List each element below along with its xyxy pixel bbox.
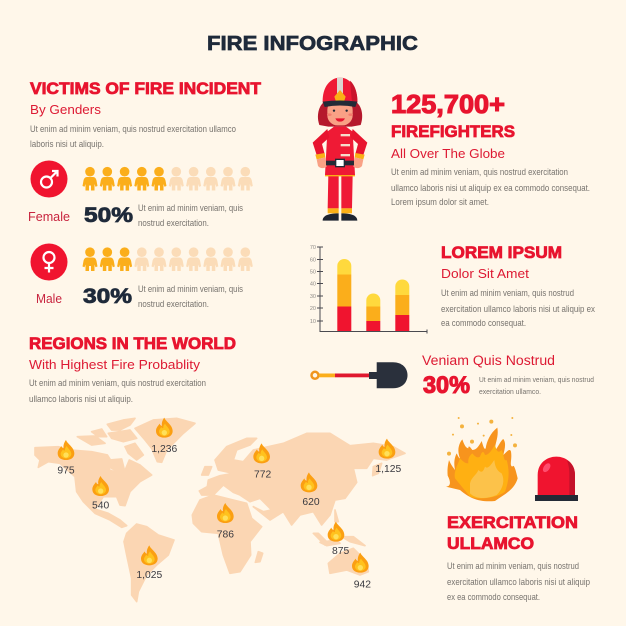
text block: lorem ipsum: Ut enim ad minim veniam, quis nostrud	[441, 288, 574, 299]
text block: regions: Ut enim ad minim veniam, quis nostrud exercitation	[29, 378, 206, 389]
pictogram: 30 percent row	[82, 247, 253, 271]
label: male: Male	[36, 292, 62, 306]
text block: regions: ullamco laboris nisi ut aliquip.	[29, 394, 133, 405]
text block: victims intro: laboris nisi ut aliquip.	[30, 139, 104, 150]
panel: exercitation ullamco	[447, 513, 590, 603]
heading: lorem ipsum: LOREM IPSUM	[441, 243, 562, 262]
text block: male note	[138, 284, 243, 310]
stat: 30 percent red: 30%	[423, 372, 470, 399]
stacked bar chart: 70	[310, 245, 316, 251]
map marker: 1,125	[375, 439, 402, 475]
stacked bar chart: 40	[310, 282, 316, 288]
text block: firefighters: Ut enim ad minim veniam, quis nostrud exercitation	[391, 167, 568, 178]
heading: exercitation ullamco	[447, 513, 578, 553]
stacked bar chart: 60	[310, 258, 316, 264]
label: female: Female	[28, 210, 70, 224]
stacked bar chart: 50	[310, 270, 316, 276]
text block: regions	[29, 378, 206, 405]
map marker: 540: 540	[92, 501, 110, 512]
icon: shovel	[312, 362, 408, 388]
map marker: 772	[253, 443, 272, 481]
text block: veniam: exercitation ullamco.	[479, 387, 541, 396]
heading: exercitation ullamco: EXERCITATION	[447, 513, 578, 532]
stat: 50 percent: 50%	[84, 204, 133, 227]
panel: veniam quis nostrud	[422, 353, 594, 399]
map marker: 540	[92, 476, 110, 512]
text block: male note: Ut enim ad minim veniam, quis	[138, 284, 243, 295]
text block: victims intro: Ut enim ad minim veniam, quis nostrud exercitation ullamco	[30, 124, 236, 135]
title: FIRE INFOGRAPHIC	[207, 33, 418, 55]
panel: lorem ipsum	[441, 243, 595, 329]
subheading: dolor sit amet: Dolor Sit Amet	[441, 266, 529, 281]
panel: regions heading	[29, 334, 236, 405]
text block: female note: Ut enim ad minim veniam, quis	[138, 203, 243, 214]
map marker: 1,125: 1,125	[375, 464, 402, 475]
text block: female note: nostrud exercitation.	[138, 218, 209, 229]
heading: firefighters: FIREFIGHTERS	[391, 122, 515, 141]
stat: 30 percent: 30%	[83, 285, 132, 308]
map marker: 1,236	[151, 418, 178, 455]
text block: firefighters: ullamco laboris nisi ut aliquip ex ea commodo consequat.	[391, 183, 590, 194]
subheading: fire probability: With Highest Fire Probablity	[29, 357, 201, 372]
map marker: 786: 786	[217, 529, 234, 540]
world map	[35, 418, 405, 602]
text block: firefighters	[391, 167, 590, 208]
text block: veniam: Ut enim ad minim veniam, quis nostrud	[479, 375, 594, 384]
icon: gender symbol bottom	[30, 244, 68, 280]
subheading: by genders: By Genders	[30, 102, 102, 117]
text block: lorem ipsum: exercitation ullamco laboris nisi ut aliquip ex	[441, 304, 595, 315]
map marker: 620: 620	[302, 497, 320, 508]
text block: firefighters: Lorem ipsum dolor sit amet.	[391, 197, 489, 208]
text block: veniam	[479, 375, 594, 396]
subheading: veniam quis nostrud: Veniam Quis Nostrud	[422, 353, 555, 368]
map marker: 875: 875	[332, 546, 350, 557]
text block: lorem ipsum: ea commodo consequat.	[441, 318, 526, 329]
icon: alarm siren	[535, 457, 578, 501]
illustration: firefighter	[313, 78, 367, 221]
text block: female note	[138, 203, 243, 229]
map marker: 786	[217, 503, 234, 540]
pictogram: 50 percent row	[82, 167, 253, 190]
map marker: 620	[301, 472, 320, 508]
map marker: 975: 975	[57, 466, 75, 477]
text block: exercitation: Ut enim ad minim veniam, quis nostrud	[447, 561, 579, 572]
heading: regions: REGIONS IN THE WORLD	[29, 334, 236, 353]
map marker: 942: 942	[354, 579, 371, 590]
text block: victims intro	[30, 124, 236, 150]
heading: victims: VICTIMS OF FIRE INCIDENT	[30, 79, 262, 98]
stacked bar chart: 10	[310, 319, 316, 325]
illustration: big flame	[446, 417, 518, 501]
text block: exercitation: exercitation ullamco laboris nisi ut aliquip	[447, 577, 590, 588]
icon: gender symbol top	[30, 160, 68, 198]
panel: victims by gender	[28, 79, 262, 310]
map marker: 975	[57, 440, 75, 477]
map marker: 1,025	[136, 545, 163, 581]
text block: male note: nostrud exercitation.	[138, 299, 209, 310]
text block: lorem ipsum	[441, 288, 595, 329]
heading: exercitation ullamco: ULLAMCO	[447, 534, 534, 553]
map: landmasses	[35, 418, 405, 602]
stacked bar chart: 30	[310, 294, 316, 300]
map marker: 875	[328, 522, 350, 557]
map marker: 772: 772	[254, 470, 272, 481]
subheading: all over the globe: All Over The Globe	[391, 146, 505, 161]
panel: firefighters stat	[391, 89, 590, 208]
stacked bar chart: 20	[310, 306, 316, 312]
map marker: 1,236: 1,236	[151, 444, 178, 455]
stacked bar chart	[310, 245, 427, 334]
map marker: 1,025: 1,025	[136, 570, 163, 581]
text block: exercitation	[447, 561, 590, 603]
text block: exercitation: ex ea commodo consequat.	[447, 592, 540, 603]
stat: firefighter count: 125,700+	[391, 89, 505, 119]
map marker: 942	[352, 553, 371, 590]
